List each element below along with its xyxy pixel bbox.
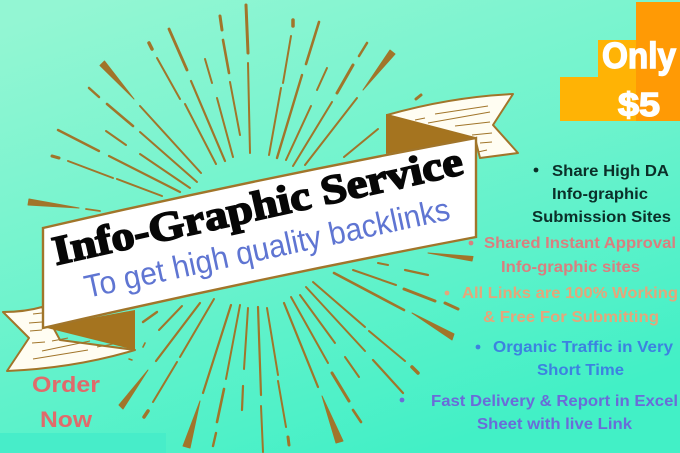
bullet: high DA sites: Share High DA xyxy=(552,163,669,180)
bullet: high DA sites xyxy=(532,163,671,226)
bullet: fast delivery xyxy=(400,393,678,433)
bullet: organic traffic xyxy=(476,339,673,379)
badge: only label: Only xyxy=(602,35,676,76)
bullet: organic traffic: Organic Traffic in Very xyxy=(493,339,673,356)
ribbon: right tail xyxy=(386,94,518,158)
bottom left tinted strip xyxy=(0,433,166,453)
sunburst rays xyxy=(28,5,473,452)
bullet: fast delivery: Fast Delivery & Report in Excel xyxy=(431,393,678,410)
ribbon: main banner xyxy=(43,138,476,328)
bullet: working links xyxy=(445,285,678,326)
ribbon: left fold xyxy=(43,310,135,350)
banner subtitle: To get high quality backlinks xyxy=(81,191,453,305)
banner title: Info-Graphic Service xyxy=(48,137,467,274)
price badge xyxy=(560,2,680,123)
bullet: organic traffic: Short Time xyxy=(537,362,624,379)
bullet: fast delivery: Sheet with live Link xyxy=(477,416,632,433)
bullet: working links: & Free For Submitting xyxy=(483,309,659,326)
bullet: instant approval: Info-graphic sites xyxy=(501,259,640,276)
ribbon: right fold xyxy=(386,114,476,154)
ribbon: left tail xyxy=(3,307,135,371)
bullet: high DA sites: Submission Sites xyxy=(532,209,671,226)
bullet: high DA sites: Info-graphic xyxy=(552,186,648,203)
badge: price: $5 xyxy=(618,86,660,123)
order now call to action: Now xyxy=(40,407,93,432)
bullet: instant approval xyxy=(469,235,676,276)
badge: dark step xyxy=(636,2,680,121)
bullet: instant approval: Shared Instant Approval xyxy=(484,235,676,252)
order now call to action xyxy=(32,372,100,432)
order now call to action: Order xyxy=(32,372,100,397)
bullet: working links: All Links are 100% Working xyxy=(462,285,678,302)
badge: light steps xyxy=(560,40,636,121)
